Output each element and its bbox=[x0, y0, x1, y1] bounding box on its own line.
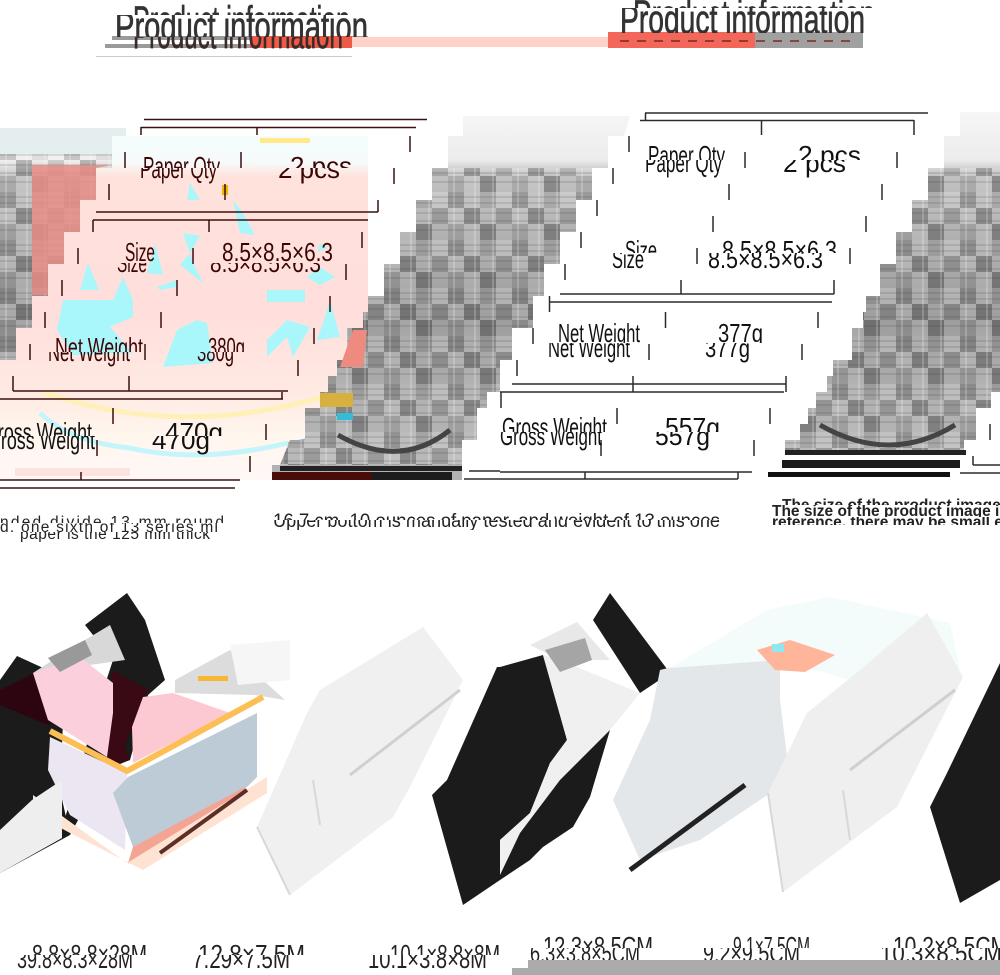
caption: left note: nded divide 13 mm round bbox=[0, 514, 224, 531]
row: net weight: 380g bbox=[197, 337, 234, 367]
row: paper quantity: 2 pcs bbox=[290, 151, 352, 181]
dimensions label row: 10.1×3.8×8M bbox=[368, 944, 487, 974]
product: box three dark side bbox=[930, 663, 1000, 903]
product: box one with pink cover bbox=[0, 593, 290, 873]
photo: right castle stack bbox=[768, 112, 1000, 477]
title: left product information: Product information bbox=[133, 0, 350, 43]
row: net weight bbox=[49, 337, 244, 366]
row: size: 8.5×8.5×6.3 bbox=[708, 244, 823, 274]
row: gross weight: 557g bbox=[665, 412, 720, 442]
caption: middle note: Upper bottom is manually tested and evident to this one bbox=[273, 511, 720, 532]
row: net weight bbox=[549, 323, 762, 362]
table: right specifications grid bbox=[464, 113, 1000, 479]
caption: middle note: 16.7 cm, 10 ounces of paper, and weight of 13 ounces bbox=[273, 511, 720, 532]
caption: left note: paper is the 125 mm thick bbox=[20, 526, 210, 543]
row: size: 8.5×8.5×6.3 bbox=[722, 235, 837, 265]
dimensions label row: 8.8×8.8×28M bbox=[32, 939, 147, 969]
panel: pink castle silhouette bbox=[0, 136, 368, 480]
row: gross weight: 557g bbox=[655, 421, 710, 451]
row: net weight: Net Weight bbox=[55, 332, 144, 362]
dimensions label row: 12.3×8.5CM bbox=[543, 931, 653, 961]
dimensions label row bbox=[18, 936, 1000, 968]
row: size: Size bbox=[125, 237, 155, 267]
row: gross weight bbox=[500, 417, 718, 450]
caption: left note bbox=[0, 514, 224, 543]
row: net weight: Net Weight bbox=[548, 333, 630, 363]
row: net weight: 377g bbox=[718, 318, 763, 348]
dimensions label row: 39.8×8.3×28M bbox=[17, 944, 133, 974]
row: net weight: 377g bbox=[705, 333, 750, 363]
title: left product information: Product information bbox=[133, 13, 343, 57]
row: paper quantity: Paper Qty bbox=[140, 154, 217, 184]
dimensions label row: 12.8×7.5M bbox=[198, 939, 305, 969]
title: left product information bbox=[96, 0, 608, 57]
title: left product information: Product information bbox=[115, 5, 368, 49]
product: box two with dark sides bbox=[432, 593, 960, 905]
row: net weight: 380g bbox=[208, 332, 245, 362]
row: gross weight: Gross Weight bbox=[502, 412, 608, 442]
row: size: 8.5×8.5×6.3 bbox=[222, 237, 333, 267]
row: gross weight: Gross Weight bbox=[500, 421, 603, 451]
row: gross weight: 470g bbox=[165, 417, 223, 447]
row: paper quantity: 2 pcs bbox=[278, 154, 340, 184]
row: net weight: Net Weight bbox=[48, 337, 130, 367]
row: paper quantity: 2 pcs bbox=[798, 140, 861, 170]
row: paper quantity: Paper Qty bbox=[645, 148, 722, 178]
row: size bbox=[118, 242, 332, 272]
dimensions label row: 6.3×3.8×5CM bbox=[530, 938, 640, 968]
row: size: Size bbox=[625, 235, 657, 265]
caption: left note: d, one sixth of 13 series ml bbox=[0, 519, 218, 536]
row: gross weight: 470g bbox=[152, 425, 210, 455]
dimensions label row: 7.29×7.5M bbox=[192, 944, 290, 974]
footer strip bbox=[512, 960, 1000, 975]
row: size: Size bbox=[117, 248, 147, 278]
title: right product information bbox=[608, 0, 875, 48]
row: paper quantity: 2 pcs bbox=[783, 148, 846, 178]
row: net weight: Net Weight bbox=[558, 318, 640, 348]
row: size: Size bbox=[612, 244, 644, 274]
caption: right note bbox=[772, 498, 1000, 525]
dimensions label row: 9.2×9.5CM bbox=[703, 938, 800, 968]
row: size: 8.5×8.5×6.3 bbox=[210, 248, 321, 278]
product: transparent acrylic case two bbox=[768, 613, 963, 892]
product: transparent acrylic case one bbox=[257, 627, 463, 895]
photo: left stack edge bbox=[0, 128, 126, 360]
row: paper quantity bbox=[646, 146, 860, 178]
row: paper quantity: Paper Qty bbox=[648, 140, 725, 170]
row: paper quantity bbox=[141, 156, 351, 184]
photo: central castle stack bbox=[272, 116, 630, 480]
row: gross weight bbox=[0, 422, 222, 454]
castle shapes in cyan bbox=[57, 183, 340, 367]
row: size bbox=[612, 240, 836, 268]
dimensions label row: 9.1×7.5CM bbox=[733, 931, 810, 961]
dimensions label row: 10.1×8.8×8M bbox=[390, 939, 500, 969]
row: paper quantity: Paper Qty bbox=[143, 151, 220, 181]
table: left specifications grid bbox=[0, 120, 427, 488]
